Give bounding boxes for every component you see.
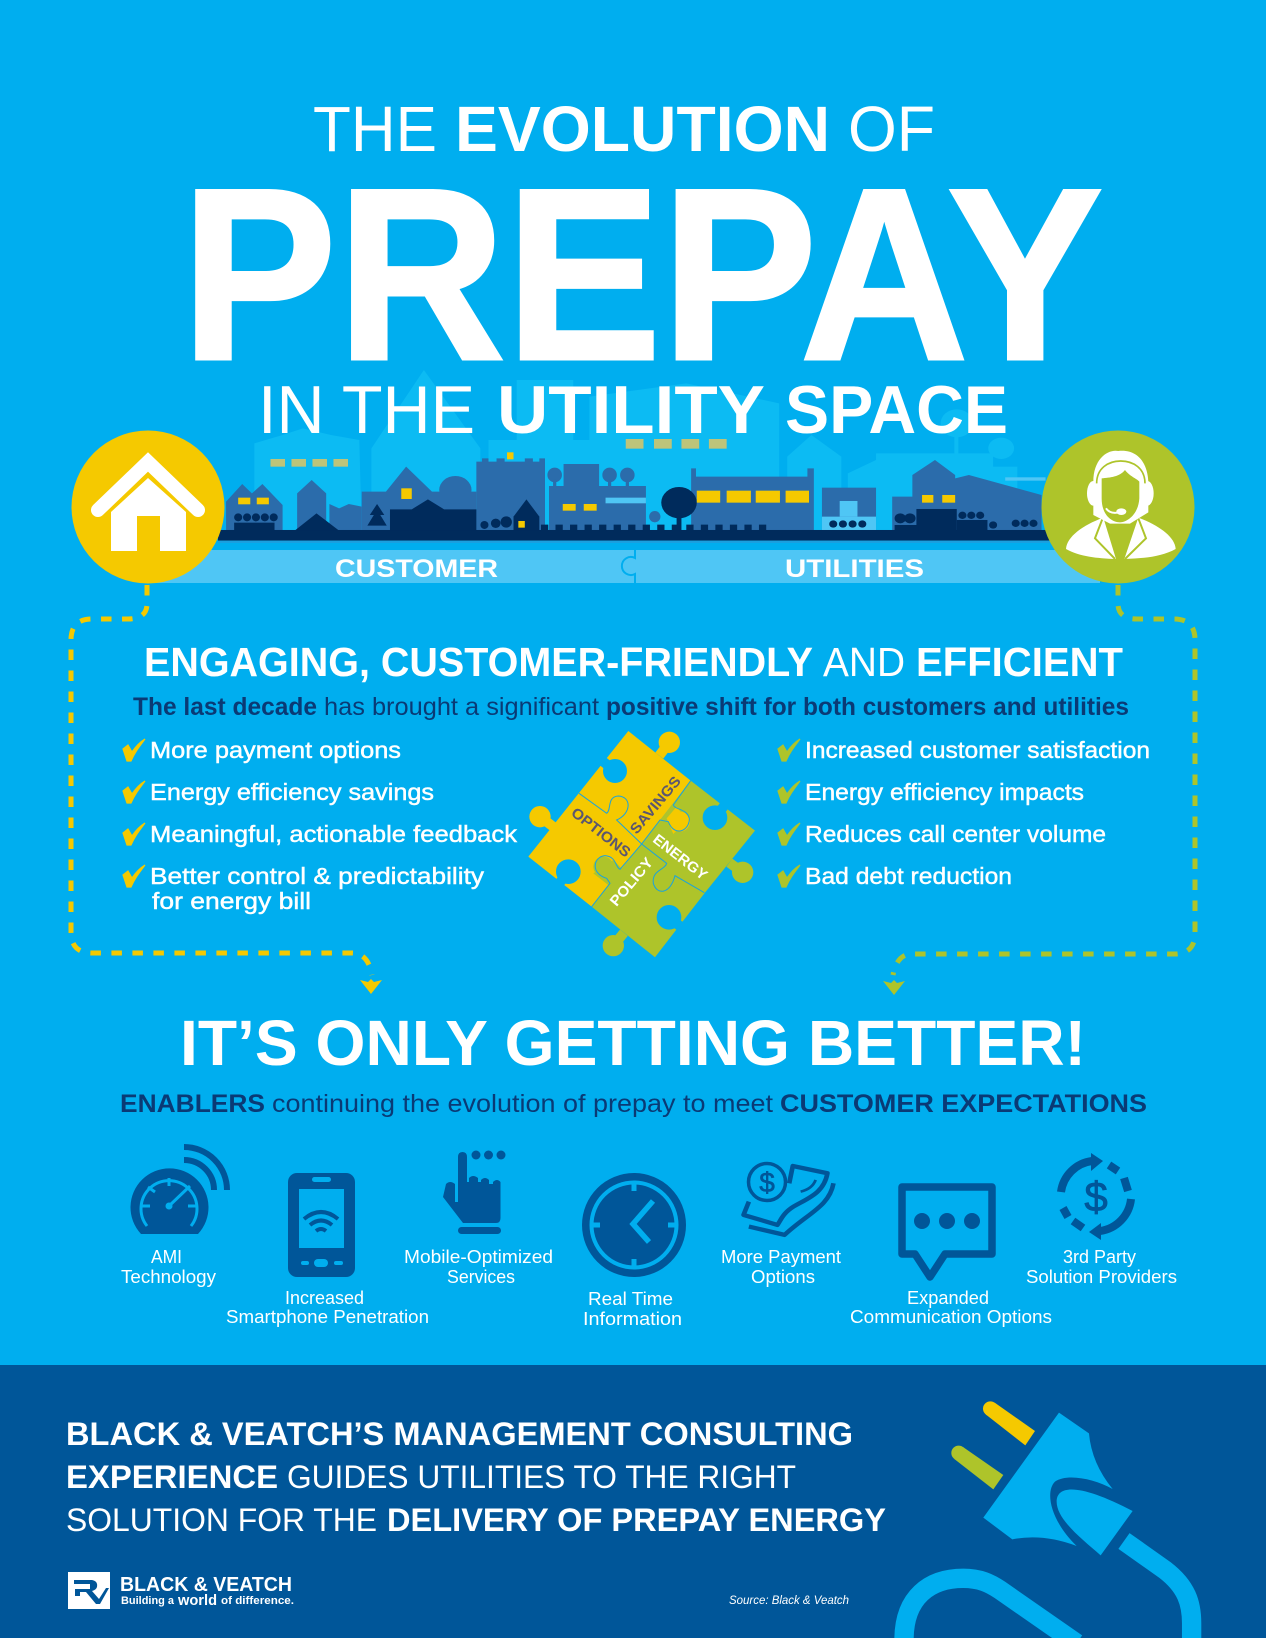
- footer statement: SOLUTION FOR THE: [66, 1502, 377, 1538]
- enabler: mobile-optimized services: Services: [447, 1267, 515, 1287]
- puzzle graphic: [528, 731, 755, 957]
- customer / utilities bar: [150, 549, 1100, 584]
- enabler: 3rd party solution providers: [1026, 1153, 1177, 1287]
- enabler: more payment options: [721, 1164, 841, 1287]
- subheading: The last decade: [133, 693, 317, 721]
- enabler: real time information: Information: [583, 1309, 682, 1329]
- seam lines: [579, 781, 704, 907]
- title line 3: IN THE: [258, 372, 475, 448]
- enabler: real time information: [582, 1173, 686, 1329]
- footer statement: GUIDES UTILITIES TO THE RIGHT: [287, 1459, 796, 1495]
- title line 1: THE: [313, 93, 437, 165]
- title line 1: OF: [848, 93, 935, 165]
- lit yellow windows: [238, 452, 955, 528]
- label: customer: CUSTOMER: [335, 555, 498, 583]
- icon: coin and banknotes: $: [759, 1167, 775, 1198]
- enabler: expanded communication options: Communication Options: [850, 1307, 1052, 1327]
- piece label: policy: POLICY: [607, 855, 657, 910]
- title line 3: UTILITY: [497, 372, 765, 448]
- enabler: AMI technology: Technology: [121, 1267, 216, 1287]
- enabler: 3rd party solution providers: 3rd Party: [1063, 1247, 1136, 1267]
- enabler: expanded communication options: Expanded: [907, 1288, 989, 1308]
- icon: smartphone: [288, 1173, 355, 1277]
- subheading: has brought a significant: [324, 693, 599, 721]
- title: PREPAY: PREPAY: [181, 137, 1103, 411]
- heading: it's only getting better: IT’S ONLY GETTING BETTER!: [180, 1007, 1086, 1079]
- title line 1: EVOLUTION: [455, 93, 830, 165]
- icon: electric plug: [904, 1401, 1192, 1638]
- footer panel: [0, 1365, 1266, 1638]
- icon: call-center agent in green circle: [1042, 430, 1194, 584]
- icon: clock: [582, 1173, 686, 1277]
- outer tabs: [529, 732, 753, 956]
- dashed connector: customer: [71, 585, 382, 994]
- logo: Black & Veatch: of difference.: [221, 1595, 294, 1607]
- logo: Black & Veatch: world: [177, 1592, 217, 1609]
- label: utilities: UTILITIES: [785, 555, 924, 583]
- title line 1: [313, 93, 935, 165]
- icon: dollar cycle: $: [1084, 1173, 1108, 1220]
- faded windows: [270, 439, 727, 467]
- heading: engaging: AND: [823, 639, 905, 685]
- lighter windows and panels: [606, 477, 1046, 532]
- checklist: utility benefits: Increased customer satisfaction: [805, 737, 1150, 763]
- enabler: mobile-optimized services: [404, 1150, 553, 1287]
- subheading: enablers: CUSTOMER EXPECTATIONS: [780, 1090, 1147, 1118]
- arrowhead: [360, 979, 382, 994]
- checklist: utility benefits: [778, 737, 1150, 889]
- source note: Source: Black & Veatch: [729, 1595, 849, 1607]
- icon: house in yellow circle: [72, 430, 224, 584]
- subheading: enablers: ENABLERS: [120, 1090, 265, 1118]
- enabler: mobile-optimized services: Mobile-Optimized: [404, 1247, 553, 1267]
- enabler: AMI technology: AMI: [151, 1247, 182, 1267]
- checklist: customer benefits: [123, 737, 518, 914]
- arrowhead: [883, 980, 905, 995]
- icon: pointing hand: [443, 1150, 506, 1234]
- footer statement: EXPERIENCE: [66, 1459, 278, 1495]
- icon: smart meter gauge: [131, 1147, 227, 1234]
- enabler: more payment options: Options: [751, 1267, 815, 1287]
- checklist: utility benefits: Reduces call center volume: [805, 821, 1106, 847]
- icon: chat bubble: [902, 1187, 992, 1277]
- checklist: customer benefits: for energy bill: [152, 888, 311, 914]
- footer statement: BLACK & VEATCH’S MANAGEMENT CONSULTING: [66, 1416, 853, 1452]
- title line 3: [258, 372, 1008, 448]
- enabler: smartphone penetration: [226, 1173, 429, 1327]
- enabler: 3rd party solution providers: Solution Providers: [1026, 1267, 1177, 1287]
- enabler: AMI technology: [121, 1147, 227, 1287]
- enabler: smartphone penetration: Smartphone Penetration: [226, 1307, 429, 1327]
- subheading: [133, 693, 1129, 721]
- piece label: savings: SAVINGS: [627, 774, 685, 838]
- logo: Black & Veatch: [68, 1572, 294, 1609]
- title: [181, 93, 1103, 448]
- icon: dollar cycle: [1061, 1153, 1131, 1240]
- piece label: energy: ENERGY: [649, 832, 710, 884]
- checklist: customer benefits: Better control & predictability: [150, 863, 485, 889]
- footer statement: [66, 1416, 886, 1538]
- outer notches: [557, 758, 727, 932]
- checklist: customer benefits: More payment options: [150, 737, 401, 763]
- checklist: utility benefits: Bad debt reduction: [805, 863, 1012, 889]
- heading: engaging: ENGAGING, CUSTOMER-FRIENDLY: [144, 639, 813, 685]
- enabler: smartphone penetration: Increased: [285, 1288, 364, 1308]
- background light buildings: [254, 370, 1017, 532]
- mid-blue buildings: [226, 458, 1042, 532]
- dashed connector: utilities: [883, 585, 1195, 995]
- logo: Black & Veatch: Building a: [121, 1595, 175, 1607]
- enabler: expanded communication options: [850, 1187, 1052, 1327]
- subheading: enablers: [120, 1090, 1147, 1118]
- enabler: real time information: Real Time: [588, 1289, 673, 1309]
- enabler: more payment options: More Payment: [721, 1247, 841, 1267]
- skyline illustration: [218, 370, 1050, 543]
- dark foreground silhouettes: [218, 487, 1050, 541]
- logo: Black & Veatch: BLACK & VEATCH: [120, 1574, 292, 1596]
- heading: engaging: EFFICIENT: [916, 639, 1123, 685]
- checklist: customer benefits: Energy efficiency savings: [150, 779, 434, 805]
- footer statement: DELIVERY OF PREPAY ENERGY: [387, 1502, 886, 1538]
- checklist: utility benefits: Energy efficiency impacts: [805, 779, 1084, 805]
- subheading: positive shift for both customers and utilities: [606, 693, 1129, 721]
- checklist: customer benefits: Meaningful, actionable feedback: [150, 821, 518, 847]
- title line 3: SPACE: [785, 372, 1008, 448]
- inner interlocking tabs: [670, 812, 690, 832]
- subheading: enablers: continuing the evolution of prepay to meet: [272, 1090, 773, 1118]
- piece label: options: OPTIONS: [568, 805, 633, 861]
